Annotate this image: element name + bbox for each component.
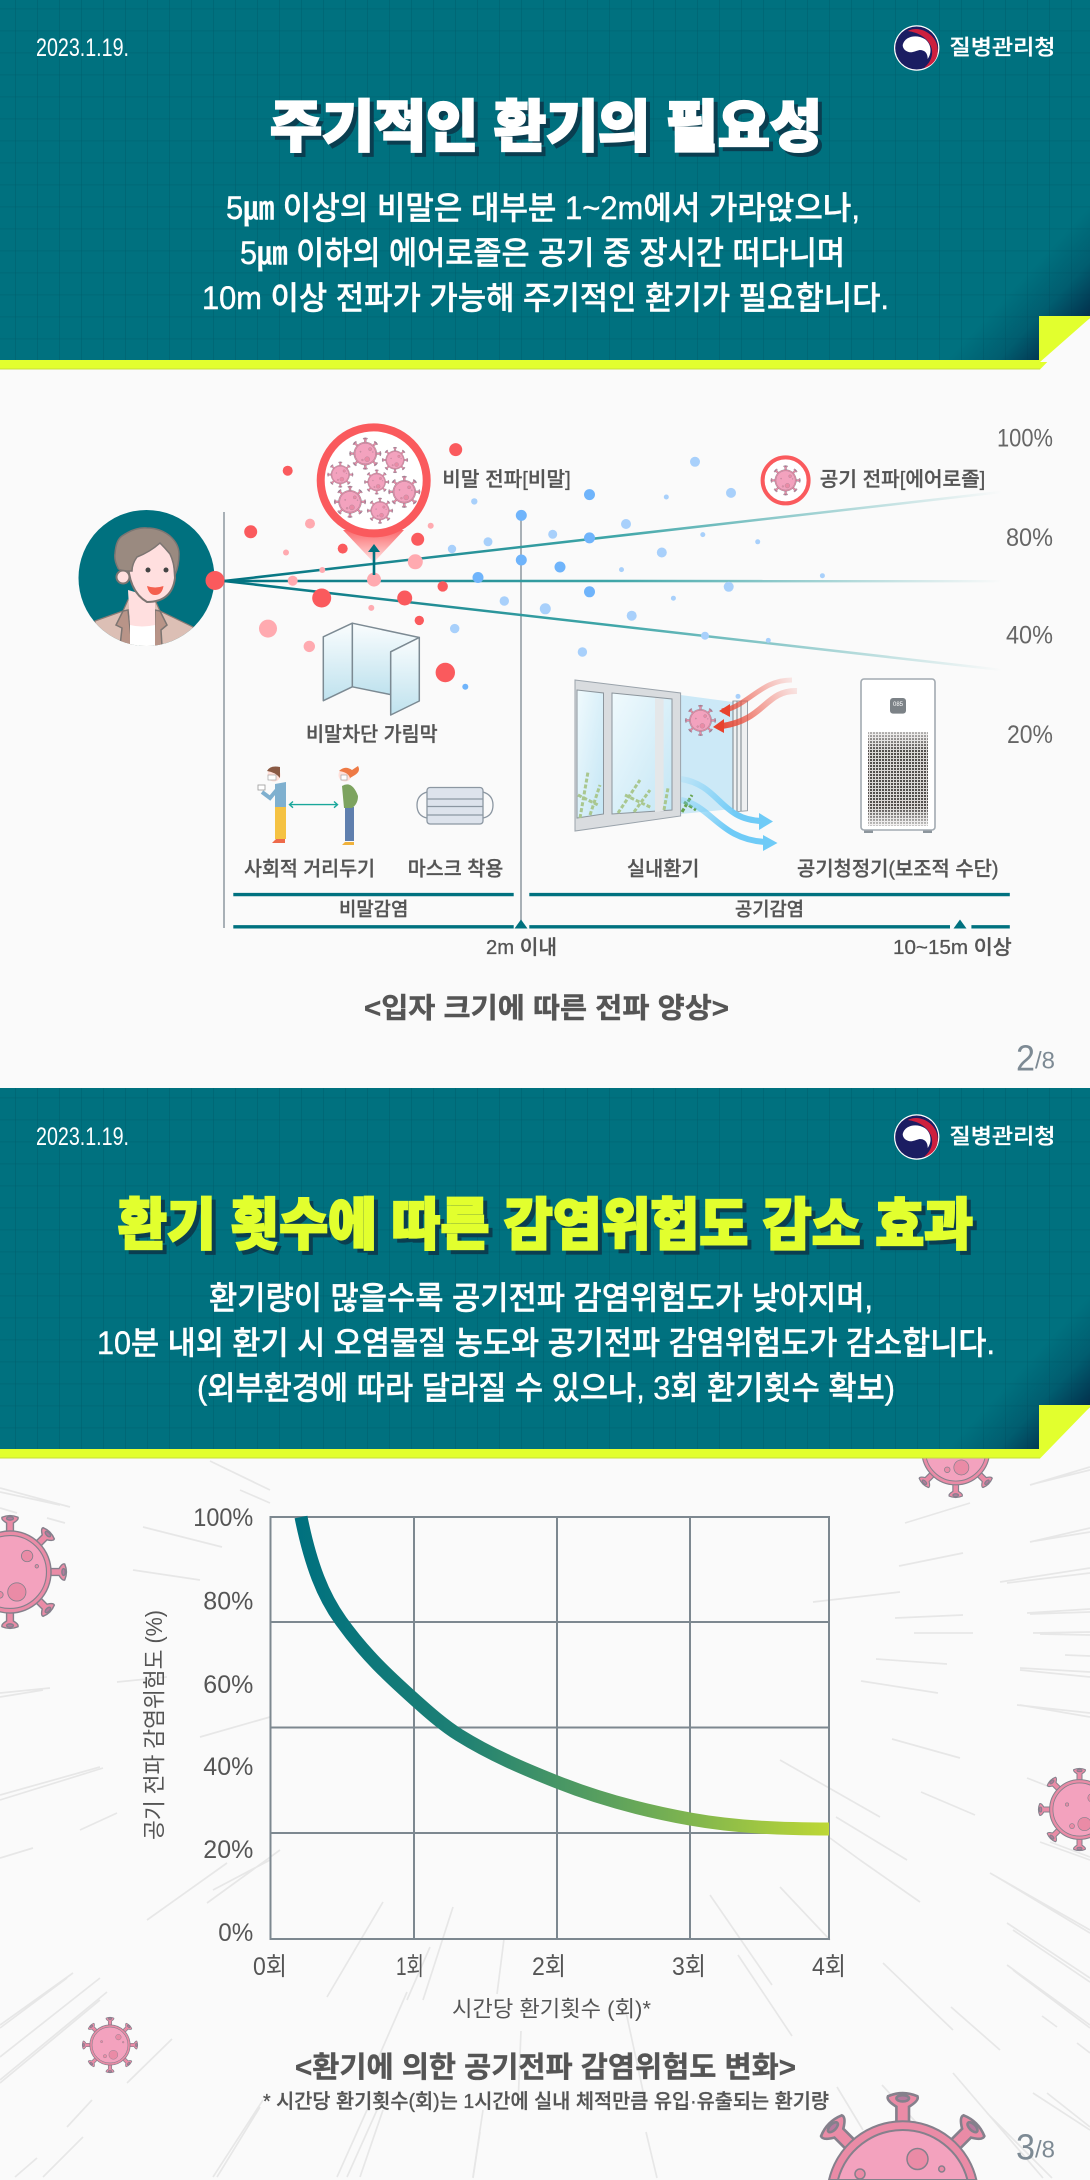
footnote: * 시간당 환기횟수(회)는 1시간에 실내 체적만큼 유입·유출되는 환기량 <box>263 2090 829 2113</box>
percent label 40: 40% <box>1006 622 1053 650</box>
icon: virus bottom <box>819 2093 987 2180</box>
x tick 1: 1회 <box>396 1953 424 1981</box>
origin dot <box>206 571 224 590</box>
arrows: incoming polluted air <box>713 680 797 733</box>
y tick 100: 100% <box>193 1504 253 1532</box>
panel: header 1 <box>0 0 1090 370</box>
icon: partition screen <box>323 623 419 715</box>
light droplet particles <box>259 519 434 652</box>
intro text line 2: 5㎛ 이하의 에어로졸은 공기 중 장시간 떠다니며 <box>240 235 845 272</box>
date: 2023.1.19. <box>36 1123 129 1151</box>
icon: virus right <box>1038 1768 1090 1851</box>
icon: virus left <box>0 1516 66 1628</box>
icon: government logo <box>894 25 939 71</box>
arrow: distance <box>290 802 338 808</box>
label: ventilation: 실내환기 <box>627 858 699 881</box>
avatar: speaker <box>78 510 214 650</box>
aerosol particles strong <box>462 489 595 690</box>
panel: transmission diagram <box>78 425 1053 959</box>
background: burst lines <box>0 1461 1090 2178</box>
icon: window ventilation <box>575 680 748 831</box>
y tick 60: 60% <box>203 1671 253 1699</box>
icon: virus small <box>82 2017 138 2073</box>
icon: virus top right <box>909 1404 1002 1498</box>
distance markers <box>514 920 966 928</box>
chart: infection risk by air changes <box>141 1504 846 2022</box>
icon: social distancing people <box>258 766 359 845</box>
page number 3 <box>1016 2126 1055 2168</box>
caption: chart: <환기에 의한 공기전파 감염위험도 변화> <box>295 2051 796 2084</box>
title: 주기적인 환기의 필요성 <box>270 96 822 158</box>
droplet particles <box>244 443 462 682</box>
date: 2023.1.19. <box>36 34 129 62</box>
aerosol particles light <box>448 457 825 699</box>
icon: mask <box>417 788 493 824</box>
label: droplet spread: 비말 전파[비말] <box>442 468 571 491</box>
label: droplet infection: 비말감염 <box>339 898 408 920</box>
page number 3: 3 <box>1016 2126 1035 2168</box>
chart grid <box>270 1517 829 1939</box>
arrow up to magnifier <box>368 544 380 575</box>
page number 3: /8 <box>1035 2136 1055 2164</box>
panel: header 2 <box>0 1088 1090 1458</box>
percent label 80: 80% <box>1006 524 1053 552</box>
x axis title: 시간당 환기횟수 (회)* <box>452 1996 651 2022</box>
page number 2: 2 <box>1016 1038 1035 1078</box>
x tick 0: 0회 <box>253 1953 287 1981</box>
intro text line 3: 10m 이상 전파가 가능해 주기적인 환기가 필요합니다. <box>202 280 889 316</box>
label: air purifier: 공기청정기(보조적 수단) <box>797 858 998 881</box>
page number 2 <box>1016 1038 1055 1078</box>
rays of spread <box>224 492 1002 670</box>
label: over 10-15m: 10~15m 이상 <box>893 936 1012 959</box>
y axis title: 공기 전파 감염위험도 (%) <box>141 1610 167 1840</box>
y tick 40: 40% <box>203 1753 253 1781</box>
label: partition: 비말차단 가림막 <box>306 723 438 746</box>
intro text line 2: 10분 내외 환기 시 오염물질 농도와 공기전파 감염위험도가 감소합니다. <box>97 1325 995 1361</box>
range bars <box>233 895 1010 927</box>
organization name: 질병관리청 <box>950 1126 1056 1148</box>
page number 2: /8 <box>1035 1048 1055 1074</box>
percent label 20: 20% <box>1007 721 1053 749</box>
arrows: outgoing fresh air <box>681 779 778 851</box>
intro text line 1: 5㎛ 이상의 비말은 대부분 1~2m에서 가라앉으나, <box>226 190 860 227</box>
risk curve <box>301 1517 829 1829</box>
organization name: 질병관리청 <box>950 36 1056 60</box>
x tick 3: 3회 <box>672 1953 706 1981</box>
title: 환기 횟수에 따른 감염위험도 감소 효과 <box>118 1194 973 1256</box>
icon: air purifier <box>861 679 935 833</box>
y tick 0: 0% <box>218 1919 253 1947</box>
label: social distancing: 사회적 거리두기 <box>244 858 375 881</box>
label: aerosol spread: 공기 전파[에어로졸] <box>820 468 985 491</box>
intro text line 3: (외부환경에 따라 달라질 수 있으나, 3회 환기횟수 확보) <box>197 1370 895 1406</box>
label: within 2m: 2m 이내 <box>486 936 557 959</box>
icon: government logo <box>894 1114 939 1160</box>
caption: diagram: <입자 크기에 따른 전파 양상> <box>364 992 729 1024</box>
percent label 100: 100% <box>997 425 1053 453</box>
icon: air purifier: 085 <box>893 702 904 708</box>
icon: aerosol virus <box>763 457 809 503</box>
distance axis lines <box>224 512 521 928</box>
y tick 80: 80% <box>203 1588 253 1616</box>
x tick 2: 2회 <box>532 1953 566 1981</box>
intro text line 1: 환기량이 많을수록 공기전파 감염위험도가 낮아지며, <box>209 1280 873 1316</box>
label: mask: 마스크 착용 <box>408 858 503 881</box>
y tick 20: 20% <box>203 1836 253 1864</box>
magnifier: droplet viruses <box>321 427 427 562</box>
label: airborne infection: 공기감염 <box>735 898 804 920</box>
x tick 4: 4회 <box>812 1953 846 1981</box>
